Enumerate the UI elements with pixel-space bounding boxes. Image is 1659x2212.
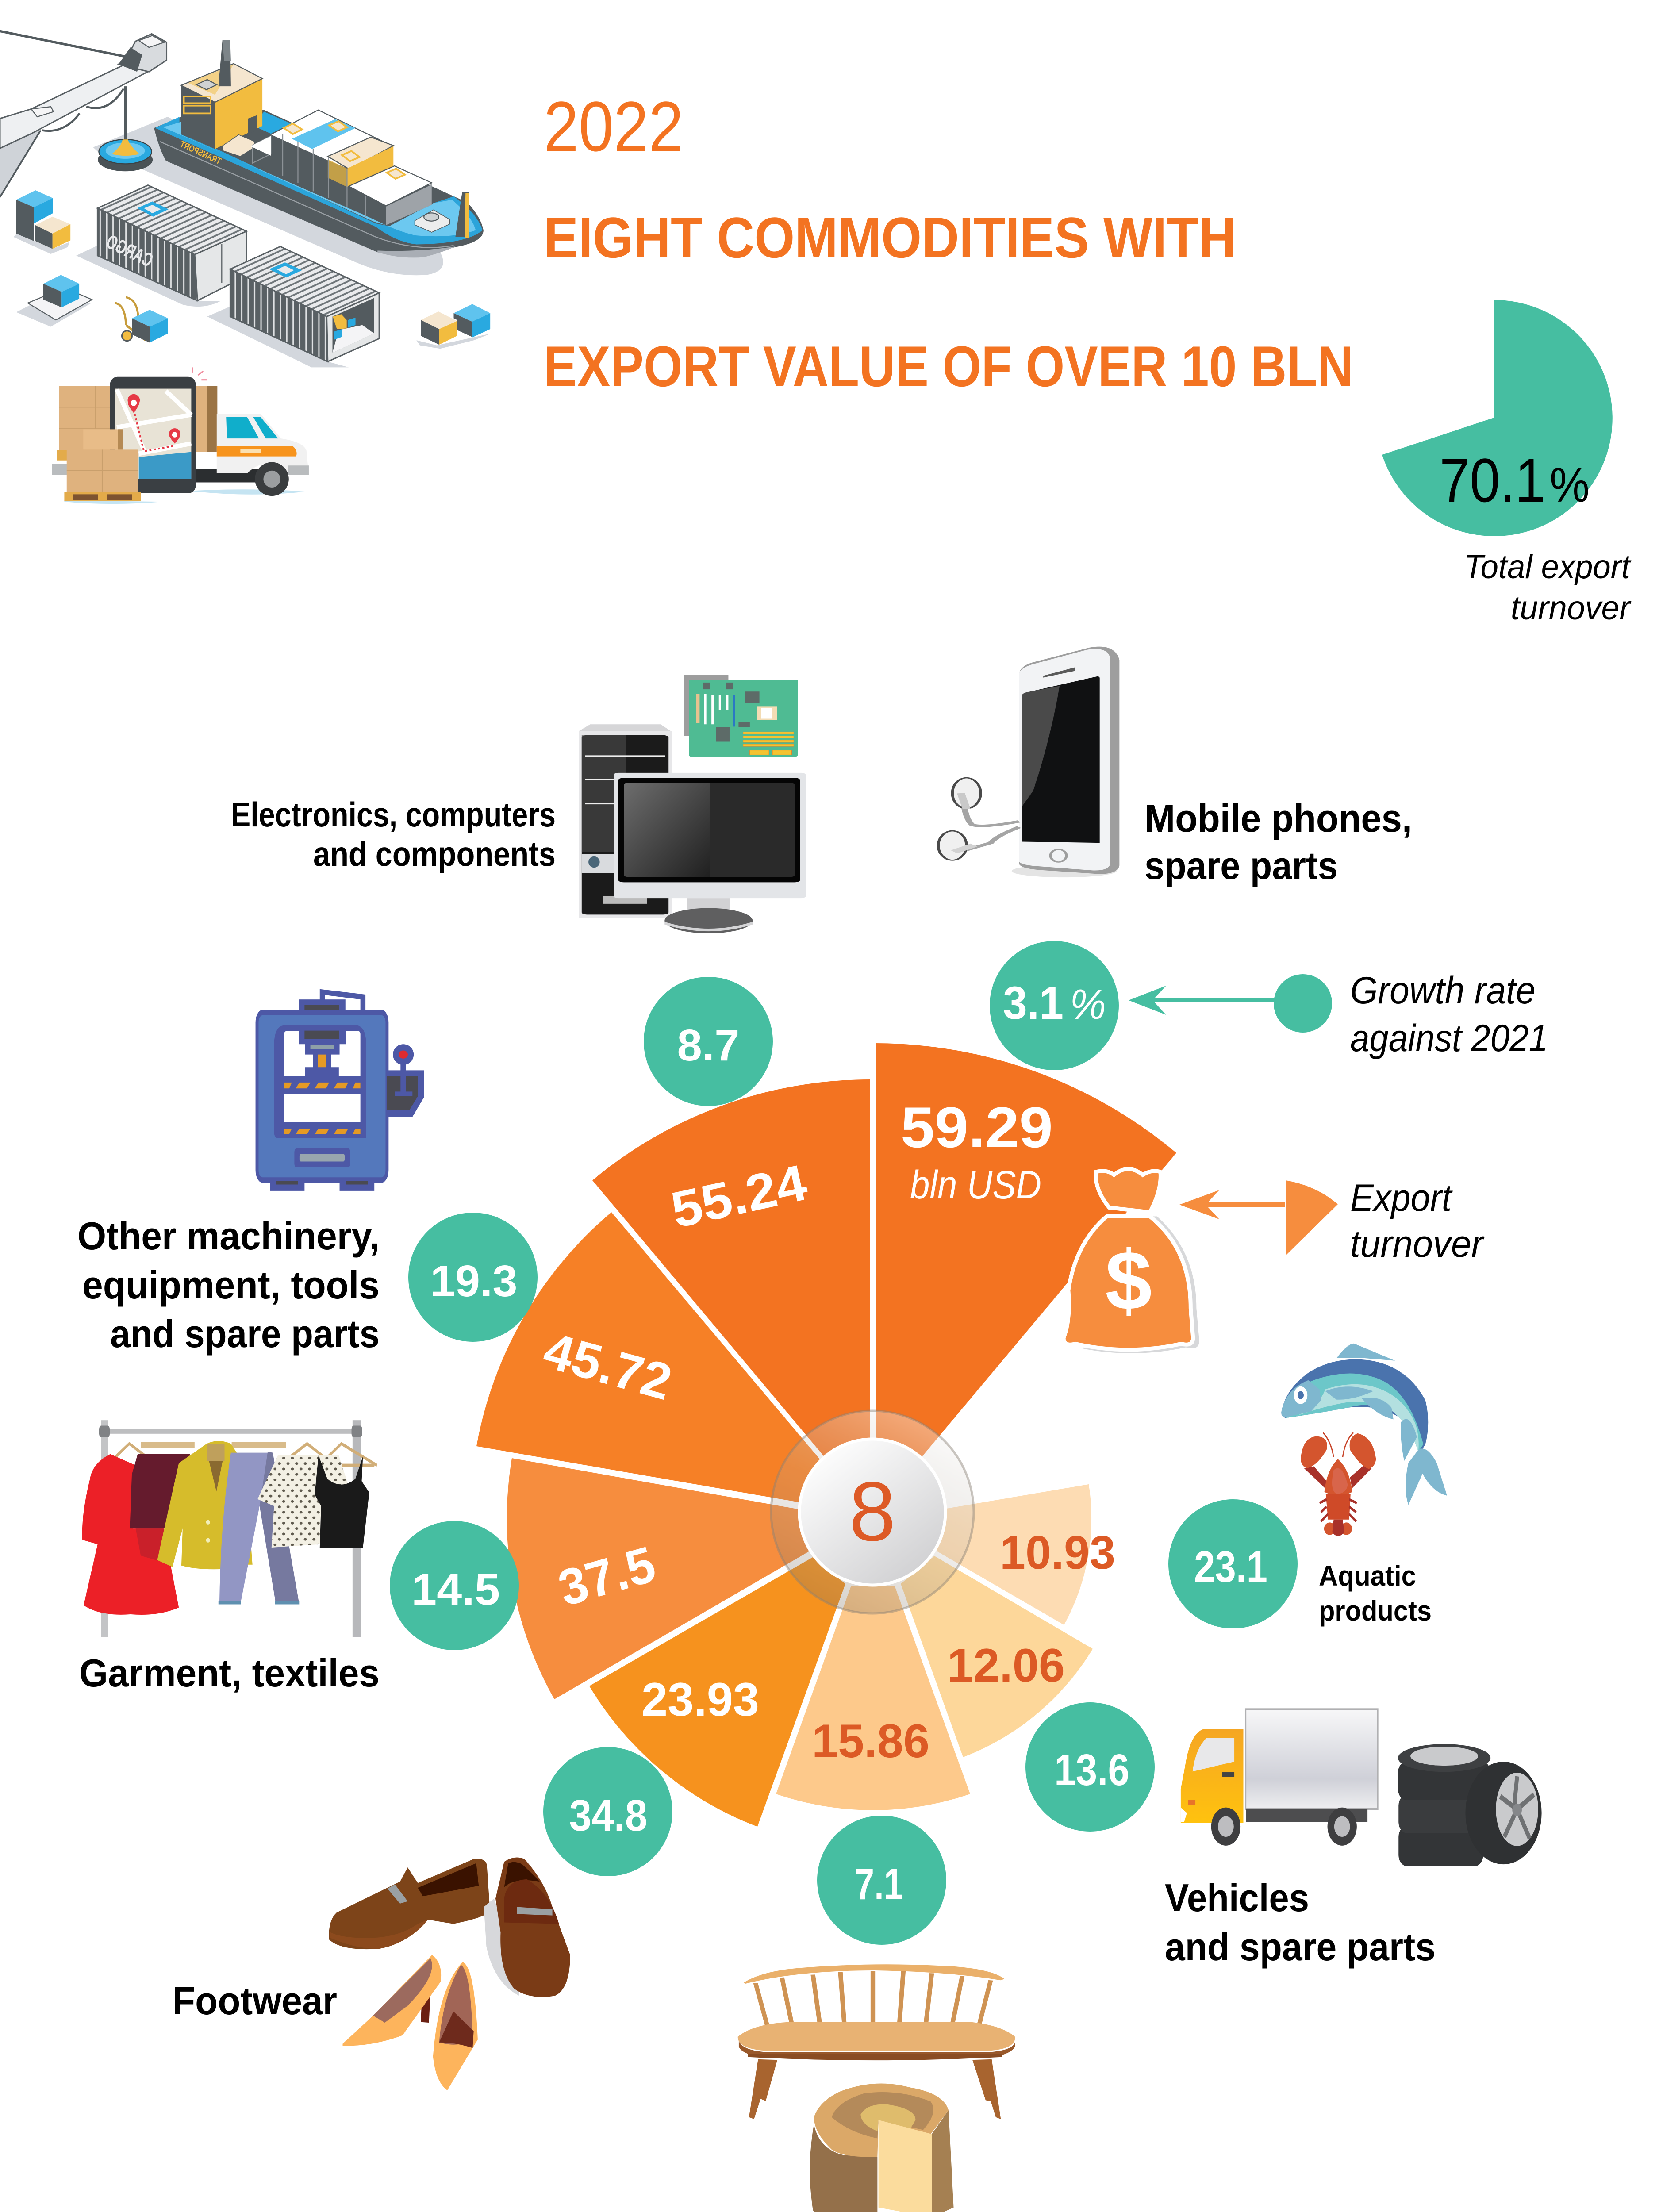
yellow jacket xyxy=(157,1441,253,1569)
pie caption: Total export xyxy=(1464,548,1632,586)
export legend text xyxy=(1350,1177,1485,1265)
icon: log stump xyxy=(810,2083,954,2212)
wedge: wood xyxy=(776,1586,970,1810)
value: 37.5: 37.5 xyxy=(553,1536,661,1617)
icon: mobile phone and earphones xyxy=(938,647,1119,877)
ship name: TRANSPORT xyxy=(178,139,223,166)
bridge superstructure xyxy=(181,40,262,149)
wedge: aquatic xyxy=(937,1484,1091,1625)
glass ring xyxy=(771,1411,974,1613)
value: 23.93: 23.93 xyxy=(641,1673,759,1726)
wedge: garment xyxy=(507,1458,810,1699)
icon: lobster xyxy=(1301,1432,1376,1536)
illustration: delivery truck, smartphone map and parcels xyxy=(52,367,309,504)
growth bubble: 14.5: 14.5 xyxy=(411,1565,500,1614)
growth bubble: 8.7 xyxy=(644,977,773,1106)
growth bubble: 7.1: 7.1 xyxy=(855,1859,903,1909)
label: vehicles: Vehicles xyxy=(1165,1876,1309,1920)
orange arrow xyxy=(1179,1190,1285,1219)
centre hub xyxy=(799,1439,945,1585)
pie caption: turnover xyxy=(1511,589,1632,627)
red dress xyxy=(82,1454,179,1615)
wedge: mobile phones xyxy=(876,1043,1176,1458)
growth bubble: 34.8: 34.8 xyxy=(569,1791,648,1840)
heel side xyxy=(342,1955,441,2046)
cargo box on pallet xyxy=(16,275,92,327)
label: vehicles xyxy=(1165,1876,1436,1969)
heel front xyxy=(433,1962,478,2090)
cargo container 1 xyxy=(76,185,246,307)
earphones xyxy=(938,778,1019,860)
loafer top xyxy=(484,1857,570,1997)
value: 15.86: 15.86 xyxy=(812,1714,929,1767)
motherboard xyxy=(684,675,798,757)
growth bubble: 19.3: 19.3 xyxy=(430,1256,518,1306)
pie percent sign: % xyxy=(1550,458,1590,512)
stacked cargo boxes left xyxy=(14,190,70,254)
polka dot blouse xyxy=(257,1455,348,1548)
growth bubble: 23.1 xyxy=(1168,1499,1298,1628)
icon: computer and motherboard xyxy=(579,675,806,933)
cargo container 2 with open end xyxy=(207,246,379,367)
title: year: 2022 xyxy=(544,87,684,166)
export legend text: Export xyxy=(1350,1177,1453,1219)
container ship xyxy=(154,40,484,257)
black tank top xyxy=(315,1455,369,1548)
icon: fish xyxy=(1281,1344,1447,1505)
legend: export turnover xyxy=(1179,1177,1485,1265)
truck xyxy=(195,386,309,496)
icon: men's loafers and women's heels xyxy=(329,1857,570,2090)
money bag dollar sign: $ xyxy=(1105,1234,1152,1328)
wedge: footwear xyxy=(589,1557,845,1827)
crane hook magnet xyxy=(98,86,153,171)
monitor xyxy=(614,773,806,933)
centre number: 8 xyxy=(849,1465,896,1559)
ship shadow xyxy=(93,117,443,275)
parcels in front on pallet xyxy=(64,429,141,501)
donut chart: export turnover by commodity xyxy=(476,1043,1176,1827)
growth bubble: 34.8 xyxy=(543,1747,672,1876)
title line 1: EIGHT COMMODITIES WITH xyxy=(544,205,1236,270)
growth bubble: 14.5 xyxy=(390,1521,519,1650)
label: other machinery: equipment, tools xyxy=(82,1263,380,1307)
cargo boxes right xyxy=(416,304,491,349)
pie value: 70.1 xyxy=(1440,445,1545,515)
growth bubble: 3.1%: % xyxy=(1070,981,1106,1028)
hand truck with box xyxy=(115,297,168,342)
label: vehicles: and spare parts xyxy=(1165,1925,1436,1969)
icon: wooden bench xyxy=(738,1964,1015,2119)
maroon skirt xyxy=(130,1454,190,1528)
label: other machinery xyxy=(77,1214,380,1356)
ground shadow xyxy=(64,489,307,504)
growth legend text xyxy=(1350,969,1548,1060)
legend: growth rate xyxy=(1129,969,1548,1060)
container stack xyxy=(250,110,432,225)
icon: stacked tyres xyxy=(1398,1744,1542,1866)
icon: money bag xyxy=(1064,1169,1199,1353)
illustration: port with crane, ship, containers and cargo boxes xyxy=(0,31,491,367)
tower case xyxy=(579,724,672,918)
growth bubble: 19.3 xyxy=(408,1213,538,1342)
growth bubble: 13.6 xyxy=(1025,1702,1155,1832)
growth bubble: 7.1 xyxy=(817,1816,946,1945)
label: aquatic products xyxy=(1319,1560,1432,1627)
orange mini wedge xyxy=(1286,1180,1338,1256)
blue jeans xyxy=(219,1452,299,1605)
loafer side xyxy=(329,1859,490,1949)
smartphone xyxy=(110,367,207,493)
export legend text: turnover xyxy=(1350,1223,1485,1265)
cargo lettering: CARGO xyxy=(103,231,157,272)
label: electronics xyxy=(231,795,556,873)
wedge: machinery xyxy=(476,1212,822,1502)
unit: bln USD: bln USD xyxy=(910,1163,1041,1207)
value: 59.29: 59.29 xyxy=(901,1095,1053,1160)
label: electronics: Electronics, computers xyxy=(231,795,556,834)
label: mobile phones xyxy=(1144,796,1412,887)
phone body xyxy=(1012,647,1119,877)
teal legend dot xyxy=(1274,974,1332,1033)
growth bubble: 23.1: 23.1 xyxy=(1194,1542,1267,1592)
value: 12.06: 12.06 xyxy=(947,1639,1065,1692)
teal arrow xyxy=(1129,986,1276,1015)
pie caption xyxy=(1464,548,1632,627)
label: other machinery: Other machinery, xyxy=(77,1214,380,1258)
label: aquatic products: Aquatic xyxy=(1319,1560,1416,1592)
label: aquatic products: products xyxy=(1319,1595,1432,1627)
growth bubble: 13.6: 13.6 xyxy=(1054,1745,1129,1795)
icon: clothes on a rack xyxy=(82,1420,377,1637)
wedge: electronics xyxy=(592,1079,870,1458)
title line 2: EXPORT VALUE OF OVER 10 BLN xyxy=(544,334,1353,399)
crane arm xyxy=(0,31,167,197)
value: 45.72: 45.72 xyxy=(538,1322,678,1411)
growth bubble: 3.1%: 3.1 xyxy=(1003,977,1064,1029)
icon: industrial press machine xyxy=(257,989,424,1191)
value: 55.24: 55.24 xyxy=(666,1154,812,1239)
label: mobile phones: spare parts xyxy=(1144,844,1338,887)
rack xyxy=(99,1420,377,1637)
icon: delivery truck xyxy=(1181,1709,1378,1846)
parcels behind phone xyxy=(52,386,112,475)
label: other machinery: and spare parts xyxy=(110,1312,380,1356)
pie chart: share of total export turnover xyxy=(1382,300,1632,627)
label: electronics: and components xyxy=(313,834,556,873)
growth bubble: 3.1% xyxy=(990,941,1119,1070)
wedge: vehicles xyxy=(901,1556,1093,1757)
growth bubble: 8.7: 8.7 xyxy=(677,1021,740,1070)
growth legend text: Growth rate xyxy=(1350,969,1536,1012)
pie sector xyxy=(1382,300,1613,536)
growth legend text: against 2021 xyxy=(1350,1017,1548,1060)
value: 10.93: 10.93 xyxy=(1000,1526,1115,1579)
label: mobile phones: Mobile phones, xyxy=(1144,796,1412,840)
label: footwear: Footwear xyxy=(173,1979,337,2023)
deck fan unit xyxy=(223,135,255,157)
label: garment, textiles: Garment, textiles xyxy=(79,1651,380,1695)
